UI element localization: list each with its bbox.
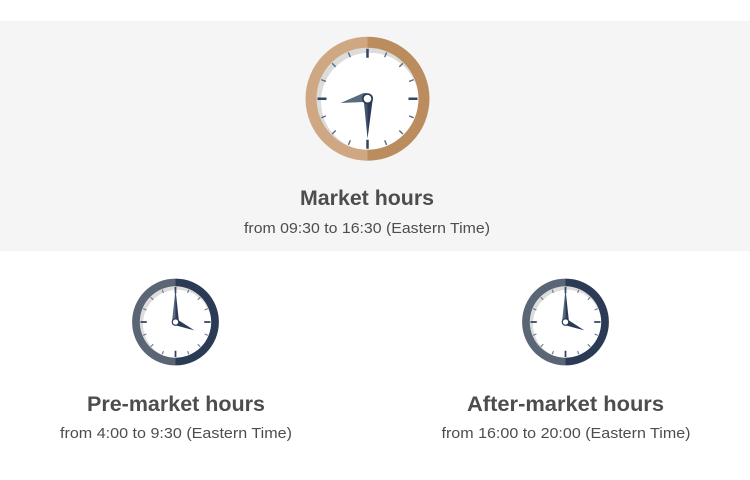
icon: after-market clock xyxy=(522,279,609,365)
heading: market hours: Market hours xyxy=(300,187,434,210)
heading: after-market hours: After-market hours xyxy=(467,393,664,416)
text: pre-market time range: from 4:00 to 9:30 (Eastern Time) xyxy=(60,425,292,442)
heading: pre-market hours: Pre-market hours xyxy=(87,393,265,416)
panel: market hours xyxy=(0,21,750,251)
icon: market hours clock xyxy=(306,37,430,161)
panel: after-market hours xyxy=(442,279,690,442)
text: market hours time range: from 09:30 to 16:30 (Eastern Time) xyxy=(244,220,490,237)
icon: pre-market clock xyxy=(132,279,219,365)
panel: pre-market hours xyxy=(60,279,292,442)
text: after-market time range: from 16:00 to 20:00 (Eastern Time) xyxy=(442,425,690,442)
